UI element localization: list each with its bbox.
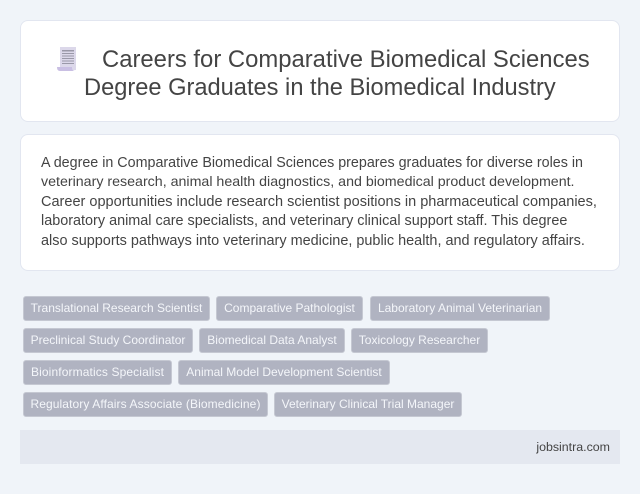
title: Careers for Comparative Biomedical Sciences xyxy=(102,46,590,73)
panel: description xyxy=(20,134,620,271)
tag xyxy=(23,296,210,321)
tag: Bioinformatics Specialist xyxy=(31,365,164,379)
footer bar xyxy=(20,430,620,464)
description text: Career opportunities include research scientist positions in pharmaceutical companies, xyxy=(41,194,597,210)
description text: also supports pathways into veterinary medicine, public health, and regulatory affairs. xyxy=(41,233,585,249)
footer text: jobsintra.com xyxy=(536,440,610,454)
tag: Regulatory Affairs Associate (Biomedicine) xyxy=(30,397,261,411)
tag xyxy=(274,392,462,417)
description text: veterinary research, animal health diagnostics, and biomedical product development. xyxy=(41,174,575,190)
tag xyxy=(178,360,390,385)
tag: Translational Research Scientist xyxy=(31,301,202,315)
panel: header xyxy=(20,20,620,122)
description text xyxy=(41,155,597,249)
tag: Veterinary Clinical Trial Manager xyxy=(282,397,454,411)
title: Degree Graduates in the Biomedical Industry xyxy=(84,75,556,101)
tag list xyxy=(23,296,550,417)
tag xyxy=(23,392,268,417)
tag xyxy=(23,360,172,385)
tag xyxy=(370,296,550,321)
tag xyxy=(23,328,193,353)
tag: Animal Model Development Scientist xyxy=(186,365,382,379)
tag: Comparative Pathologist xyxy=(224,301,355,315)
title xyxy=(84,46,590,101)
tag: Laboratory Animal Veterinarian xyxy=(378,301,542,315)
description text: laboratory animal care specialists, and veterinary clinical support staff. This degree xyxy=(41,213,567,229)
tag: Preclinical Study Coordinator xyxy=(31,333,185,347)
tag: Toxicology Researcher xyxy=(359,333,480,347)
tag xyxy=(351,328,488,353)
icon: document scroll xyxy=(57,47,76,71)
tag xyxy=(216,296,363,321)
description text: A degree in Comparative Biomedical Sciences prepares graduates for diverse roles in xyxy=(41,155,583,171)
tag xyxy=(199,328,345,353)
tag: Biomedical Data Analyst xyxy=(207,333,337,347)
